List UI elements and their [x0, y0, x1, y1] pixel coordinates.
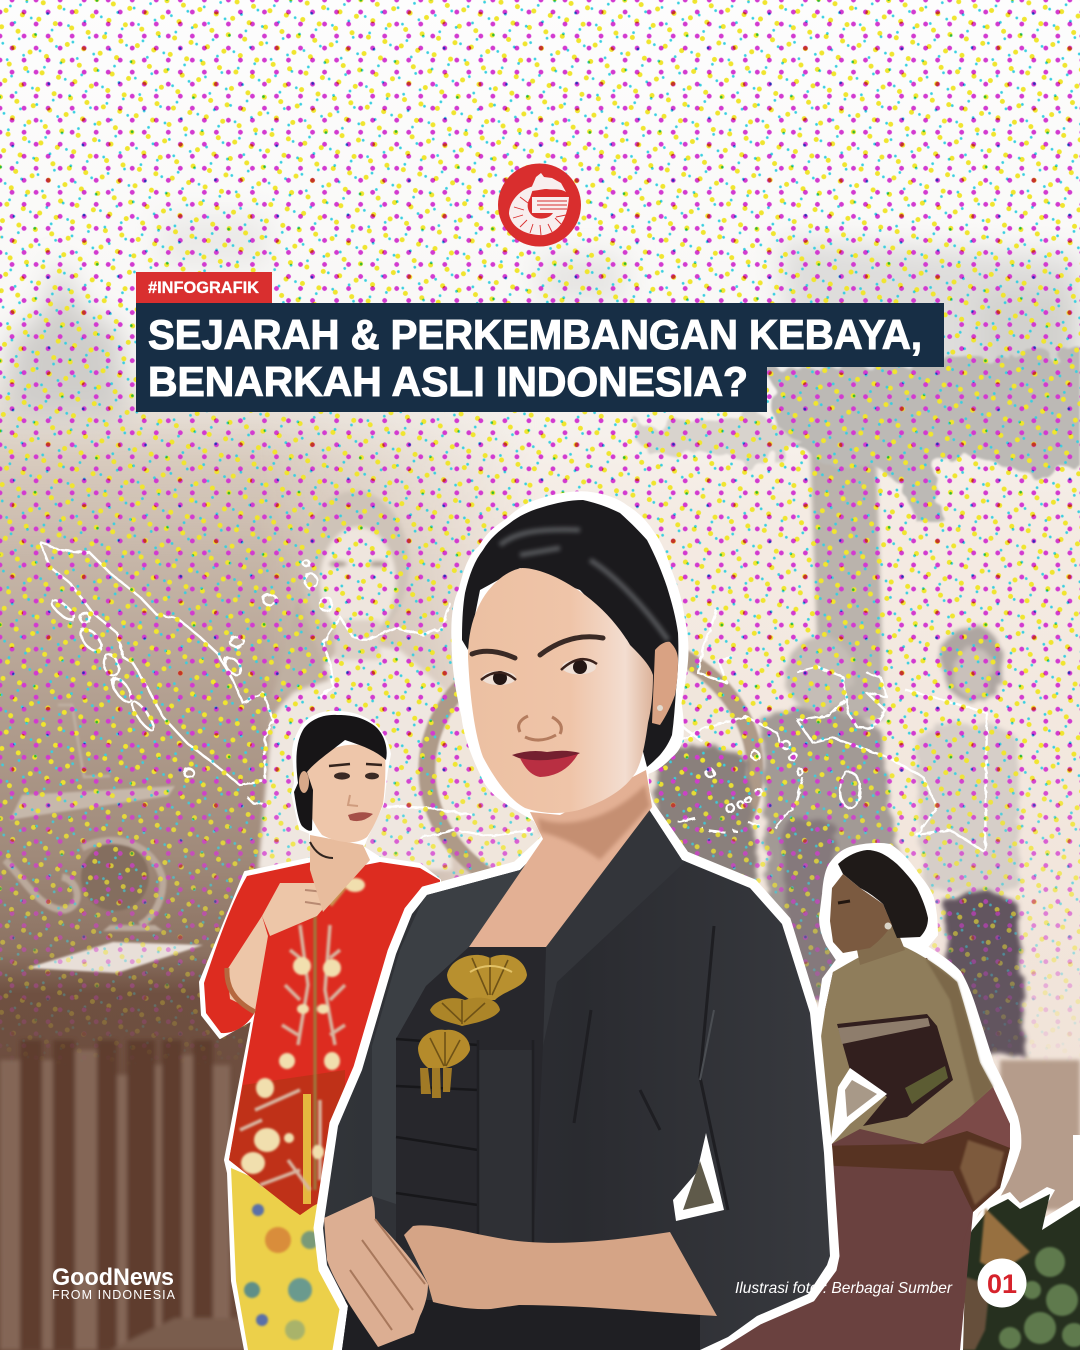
title block — [136, 303, 944, 412]
ear — [299, 771, 309, 793]
red blouse — [204, 862, 440, 1215]
kebaya body — [310, 800, 850, 1350]
tag: #INFOGRAFIK: #INFOGRAFIK — [148, 279, 259, 297]
white silhouette outline — [315, 493, 838, 1350]
background photo: misty grey buildings at the top — [5, 215, 1080, 420]
face — [468, 568, 653, 813]
hair — [294, 715, 387, 831]
figure: woman in sarong on the right — [700, 844, 1020, 1350]
batik band — [815, 1131, 1010, 1212]
ornamented G — [509, 186, 569, 235]
face — [303, 745, 385, 842]
yellow batik skirt — [231, 1168, 345, 1350]
eagle head — [530, 173, 566, 192]
face — [830, 874, 892, 953]
lower panel below arms — [340, 1300, 700, 1350]
eyebrows — [472, 637, 603, 658]
lips — [512, 751, 580, 777]
left hand — [324, 1196, 428, 1347]
hair — [462, 500, 678, 767]
sarong base — [700, 958, 1010, 1350]
nose — [519, 716, 561, 740]
forearm — [227, 916, 268, 1011]
halftone dot overlay — [0, 0, 1080, 1056]
hand — [262, 883, 328, 936]
title block: BENARKAH ASLI INDONESIA? — [148, 358, 748, 405]
eyes — [481, 659, 597, 685]
background photo: arch ring — [427, 634, 755, 906]
facial features — [329, 764, 382, 821]
gold brooches — [418, 955, 527, 1098]
brand wordmark: GoodNews from Indonesia: FROM INDONESIA — [52, 1288, 176, 1302]
floral embroidery — [240, 850, 365, 1190]
ear — [652, 642, 678, 725]
photo credit: Ilustrasi foto : Berbagai Sumber — [735, 1280, 953, 1297]
page number badge: 01 — [987, 1269, 1017, 1299]
page number badge — [978, 1258, 1026, 1308]
right lapel — [543, 807, 687, 1046]
left lapel — [372, 864, 526, 1204]
background photo: group of women on the right — [655, 626, 1024, 1055]
shoulders, arms and hands — [819, 942, 993, 1145]
background photo: ground to the right of the sarong — [1000, 1060, 1080, 1210]
tag: #INFOGRAFIK — [136, 272, 272, 303]
hair — [838, 850, 928, 938]
brand wordmark: GoodNews from Indonesia: GoodNews — [52, 1264, 174, 1291]
figure: plants bottom right — [945, 1135, 1080, 1350]
chest and neck skin — [469, 770, 652, 947]
forearm — [404, 1225, 717, 1316]
arm gap — [673, 1133, 724, 1221]
figure: central woman in black kebaya — [310, 493, 850, 1350]
darker lower blouse — [229, 1070, 345, 1215]
figure: woman in red kebaya on the left — [200, 712, 440, 1350]
upper sarong — [923, 1087, 1010, 1148]
pleats — [396, 1039, 533, 1250]
neck — [310, 835, 370, 912]
white silhouette outline — [200, 712, 440, 1350]
lower sarong — [700, 1165, 973, 1350]
sarong chest wrap — [837, 1014, 953, 1126]
logo: GoodNews red emblem — [498, 164, 581, 246]
background photo: tree foliage and pillar — [640, 350, 1080, 720]
background photo: standing woman in white blouse — [258, 491, 452, 870]
arm gap — [830, 1068, 887, 1146]
white silhouette outline — [700, 844, 1020, 1350]
background photo: piano and table on the left — [0, 705, 245, 1350]
inner blouse panel — [396, 947, 471, 1250]
neck — [855, 925, 905, 965]
title block: SEJARAH & PERKEMBANGAN KEBAYA, — [148, 311, 922, 358]
map outline of Indonesia — [40, 542, 987, 852]
